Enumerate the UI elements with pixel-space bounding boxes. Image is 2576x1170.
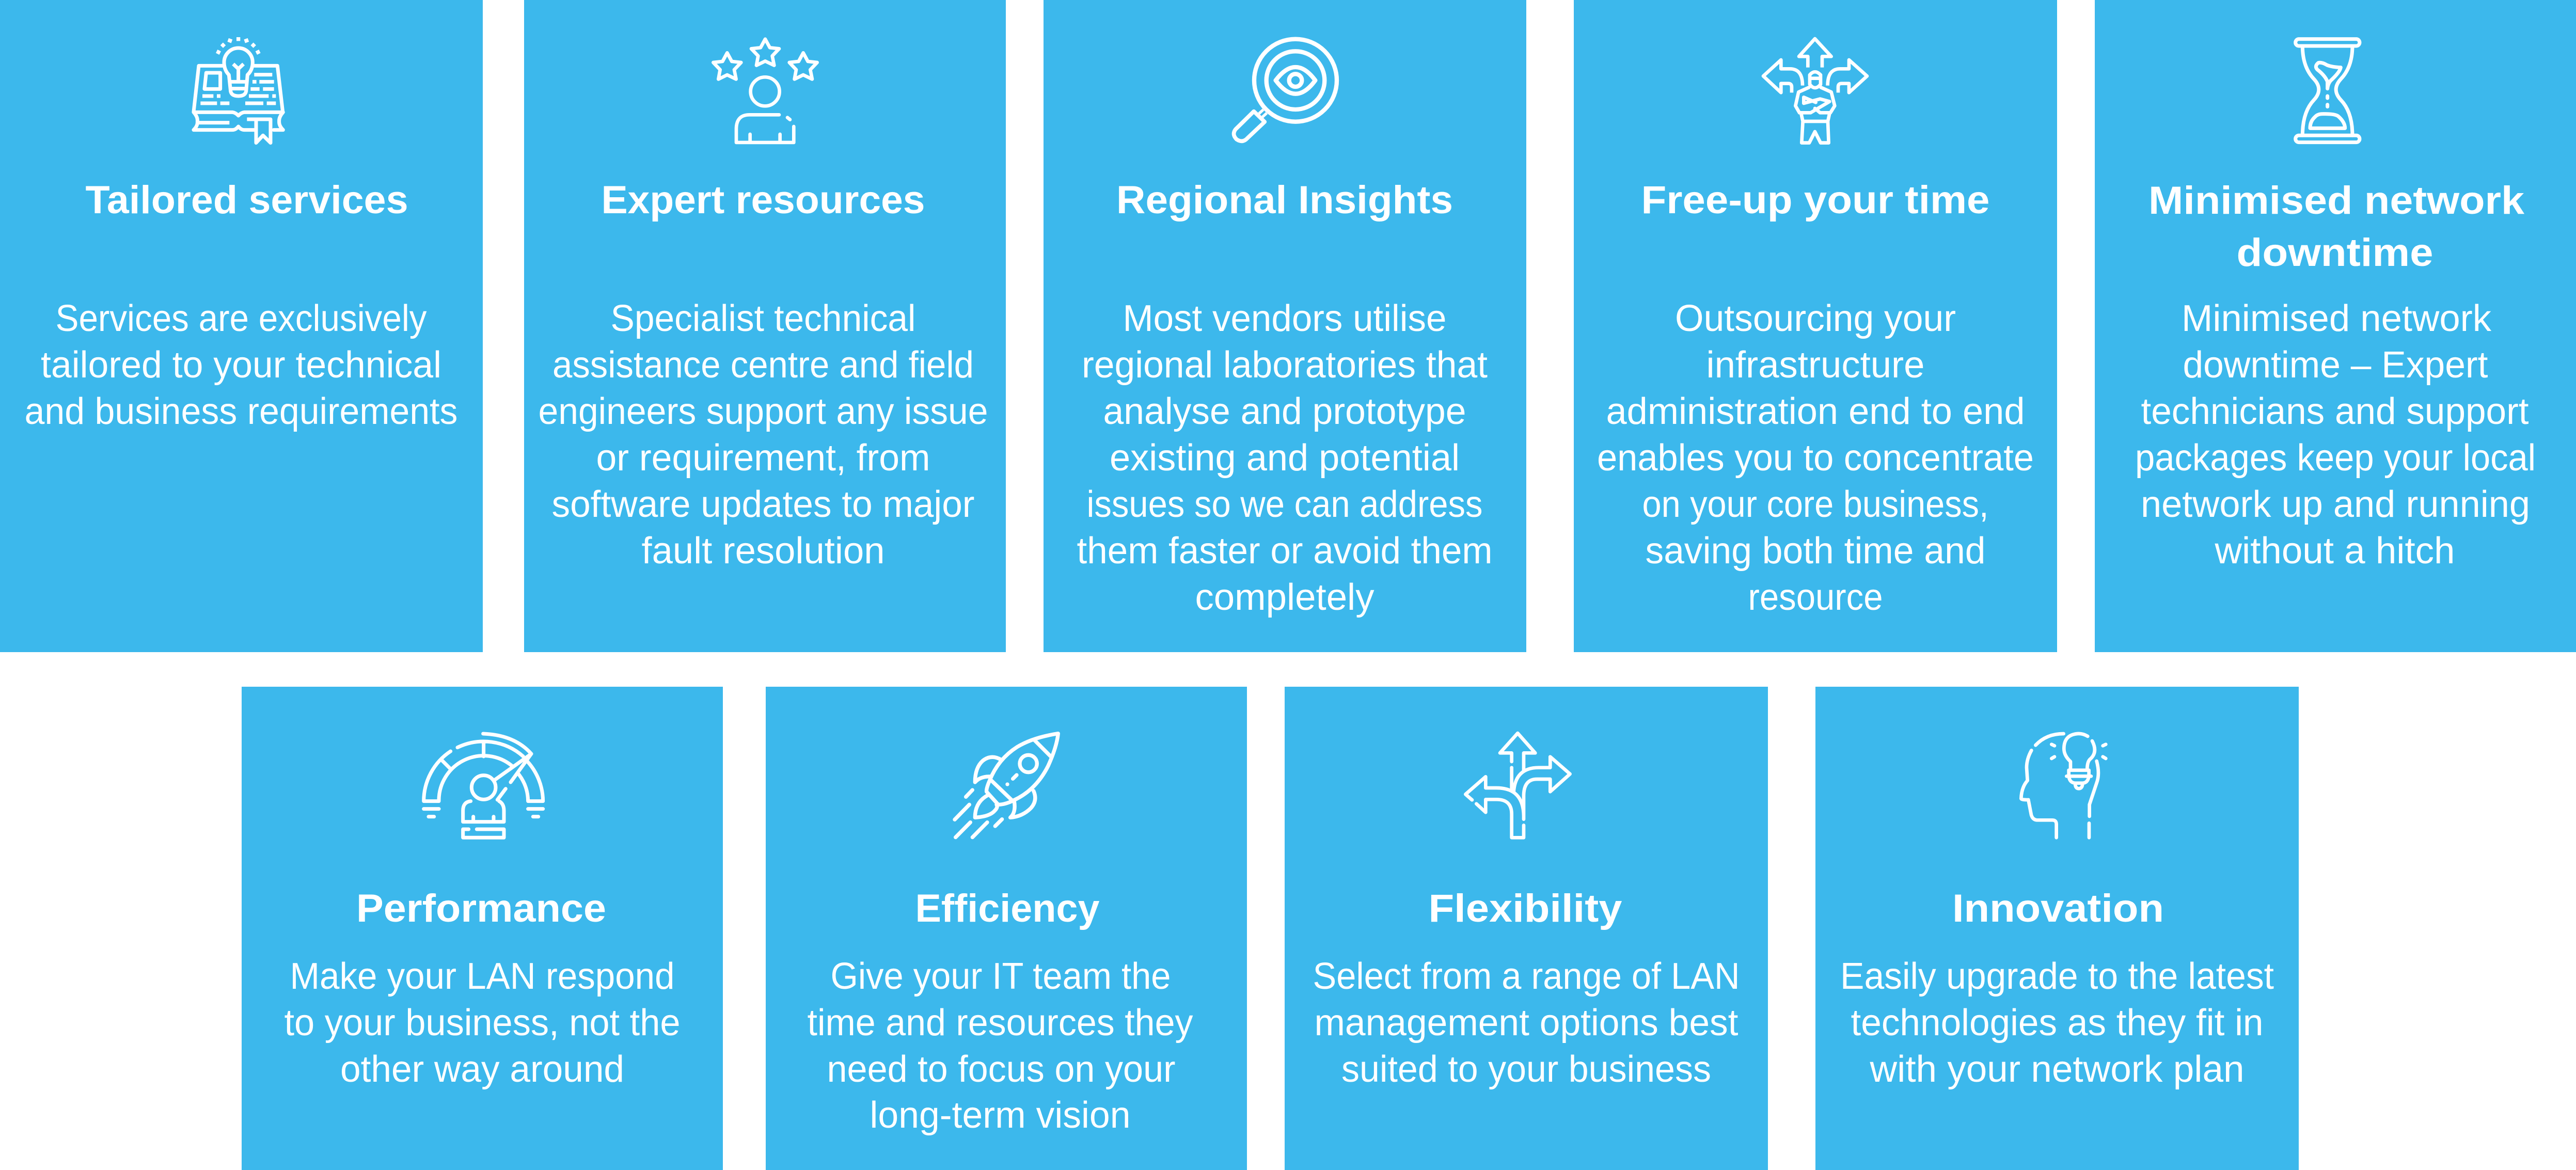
panel: Minimised network downtime — [2095, 0, 2576, 652]
heading: Innovation — [1952, 887, 2164, 930]
panel: Innovation — [1815, 687, 2299, 1170]
heading: Regional Insights — [1116, 178, 1453, 222]
body text: saving both time and — [1645, 530, 1986, 572]
icon: rocket — [955, 734, 1058, 837]
card background — [0, 0, 483, 652]
heading: Free-up your time — [1641, 178, 1990, 222]
body text: or requirement, from — [596, 437, 930, 479]
body text — [1077, 298, 1492, 618]
body text: Outsourcing your — [1675, 298, 1956, 339]
card background — [1574, 0, 2057, 652]
icon: person with crossed arms and three arrows — [1763, 39, 1867, 143]
card background — [2095, 0, 2576, 652]
panel: Regional Insights — [1044, 0, 1526, 652]
body text — [1313, 956, 1740, 1090]
body text: other way around — [340, 1049, 624, 1090]
body text: regional laboratories that — [1082, 344, 1488, 386]
body text: network up and running — [2141, 484, 2530, 525]
body text: Minimised network — [2182, 298, 2492, 339]
body text: management options best — [1315, 1002, 1738, 1043]
heading: Flexibility — [1428, 887, 1622, 930]
body text: administration end to end — [1606, 391, 2025, 432]
body text: existing and potential — [1110, 437, 1460, 479]
body text: with your network plan — [1869, 1049, 2244, 1090]
panel: Free-up your time — [1574, 0, 2057, 652]
body text: them faster or avoid them — [1077, 530, 1492, 572]
body text — [284, 956, 681, 1090]
body text: downtime – Expert — [2183, 344, 2488, 386]
heading: Minimised network — [2148, 179, 2525, 223]
body text: enables you to concentrate — [1597, 437, 2034, 479]
body text: Select from a range of LAN — [1313, 956, 1740, 997]
body text: Easily upgrade to the latest — [1840, 956, 2274, 997]
icon: open book with lightbulb — [194, 39, 283, 143]
card background — [1815, 687, 2299, 1170]
heading: Expert resources — [601, 178, 925, 222]
body text — [2135, 298, 2536, 572]
heading — [2148, 179, 2525, 275]
panel: Efficiency — [766, 687, 1247, 1170]
body text: Specialist technical — [610, 298, 916, 339]
body text: without a hitch — [2214, 530, 2455, 572]
body text: infrastructure — [1706, 344, 1925, 386]
body text: analyse and prototype — [1103, 391, 1466, 432]
body text — [1840, 956, 2274, 1090]
body text: packages keep your local — [2135, 437, 2536, 479]
body text: and business requirements — [25, 391, 457, 432]
body text — [1597, 298, 2034, 618]
body text: Make your LAN respond — [290, 956, 674, 997]
heading: Performance — [356, 887, 606, 930]
card background — [242, 687, 723, 1170]
body text: fault resolution — [641, 530, 885, 572]
body text: to your business, not the — [284, 1002, 681, 1043]
body text: need to focus on your — [827, 1049, 1175, 1090]
card background — [1285, 687, 1768, 1170]
card background — [766, 687, 1247, 1170]
panel: Expert resources — [524, 0, 1006, 652]
body text: on your core business, — [1642, 484, 1989, 525]
body text: resource — [1748, 577, 1883, 618]
panel: Flexibility — [1285, 687, 1768, 1170]
body text: completely — [1195, 577, 1374, 618]
card background — [1044, 0, 1526, 652]
icon: hourglass — [2296, 39, 2360, 143]
heading: Efficiency — [915, 887, 1100, 930]
icon: person with speedometer gauge — [424, 734, 543, 837]
icon: head with lightbulb — [2021, 734, 2106, 837]
icon: person with three stars — [713, 39, 817, 143]
heading: Tailored services — [86, 178, 408, 222]
body text: time and resources they — [808, 1002, 1193, 1043]
body text: Services are exclusively — [56, 298, 426, 339]
body text: issues so we can address — [1086, 484, 1483, 525]
body text — [538, 298, 988, 572]
body text: engineers support any issue — [538, 391, 988, 432]
card background — [524, 0, 1006, 652]
panel: Performance — [242, 687, 723, 1170]
body text: long-term vision — [870, 1095, 1131, 1136]
body text: technicians and support — [2141, 391, 2529, 432]
body text: Give your IT team the — [830, 956, 1171, 997]
icon: three-way arrows — [1465, 733, 1570, 837]
body text — [808, 956, 1193, 1136]
icon: magnifying glass with eye — [1234, 39, 1337, 141]
body text: technologies as they fit in — [1851, 1002, 2264, 1043]
body text: tailored to your technical — [41, 344, 441, 386]
panel: Tailored services — [0, 0, 483, 652]
body text: suited to your business — [1341, 1049, 1711, 1090]
body text: software updates to major — [551, 484, 975, 525]
body text — [25, 298, 457, 432]
heading: downtime — [2237, 231, 2433, 275]
body text: assistance centre and field — [552, 344, 974, 386]
body text: Most vendors utilise — [1123, 298, 1447, 339]
